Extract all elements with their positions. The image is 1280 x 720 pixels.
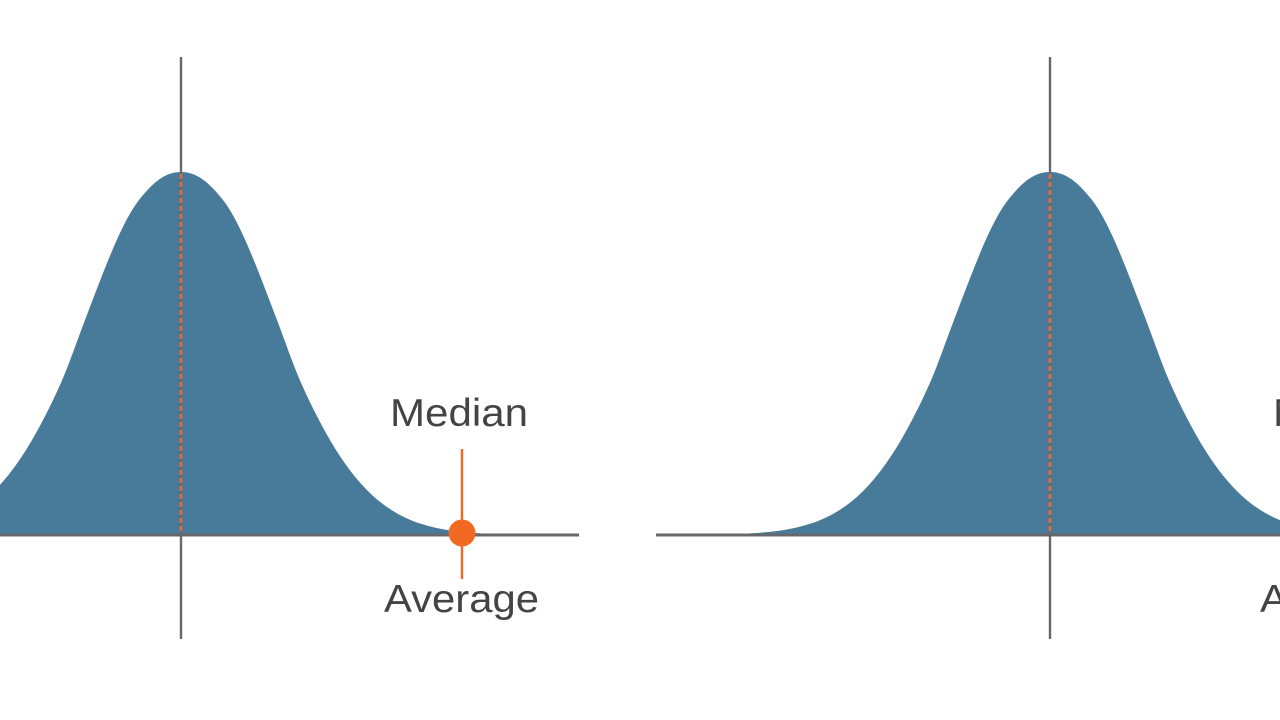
left bell curve bbox=[0, 172, 481, 535]
left vertical axis bbox=[180, 57, 182, 639]
left label: Median: Median bbox=[390, 392, 528, 435]
left orange marker line bbox=[461, 449, 463, 579]
left peak dashed line bbox=[180, 174, 182, 533]
right peak dashed line bbox=[1049, 174, 1051, 533]
left orange marker dot bbox=[448, 520, 476, 546]
right bell curve bbox=[706, 172, 1280, 535]
panel: left distribution bbox=[0, 57, 579, 639]
left label: Average: Average bbox=[384, 578, 539, 621]
panel: right distribution bbox=[656, 57, 1280, 639]
right horizontal axis bbox=[656, 534, 1280, 536]
right vertical axis bbox=[1049, 57, 1051, 639]
left horizontal axis bbox=[0, 534, 579, 536]
